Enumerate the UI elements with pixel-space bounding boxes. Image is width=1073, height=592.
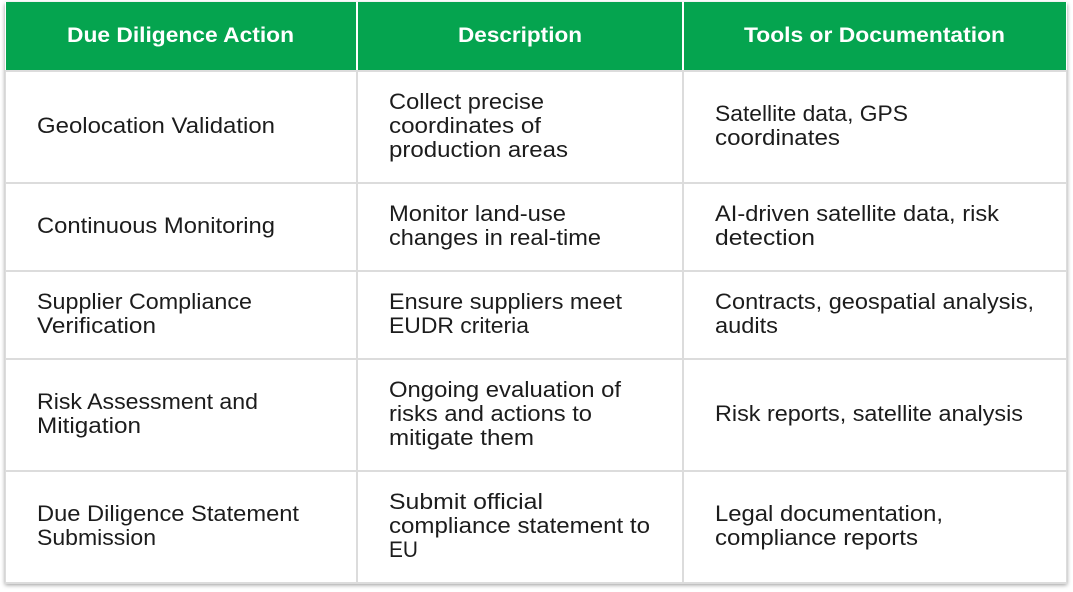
row: continuous monitoring: Continuous Monitoring xyxy=(37,213,275,238)
row: continuous monitoring: changes in real-time xyxy=(389,225,601,250)
row: continuous monitoring xyxy=(37,201,1000,250)
row: due diligence statement submission: compliance reports xyxy=(715,525,918,550)
row: supplier compliance verification: Contracts, geospatial analysis, xyxy=(715,289,1034,314)
row: continuous monitoring: detection xyxy=(715,225,815,250)
row: geolocation validation: Collect precise xyxy=(389,89,544,114)
row: due diligence statement submission xyxy=(37,489,943,562)
row: geolocation validation: production areas xyxy=(389,137,568,162)
row: due diligence statement submission: Submission xyxy=(37,525,156,550)
row: risk assessment and mitigation: Risk Assessment and xyxy=(37,389,258,414)
row: geolocation validation: coordinates of xyxy=(389,113,542,138)
row: due diligence statement submission: compliance statement to xyxy=(389,513,650,538)
row: continuous monitoring: Monitor land-use xyxy=(389,201,566,226)
row: supplier compliance verification: audits xyxy=(715,313,778,338)
row: continuous monitoring: AI-driven satellite data, risk xyxy=(715,201,1000,226)
row: due diligence statement submission: EU xyxy=(389,537,418,562)
heading: tools or documentation: Tools or Documentation xyxy=(744,24,1005,47)
row: supplier compliance verification: Ensure suppliers meet xyxy=(389,289,622,314)
header row xyxy=(6,2,1066,70)
heading: due diligence action: Due Diligence Action xyxy=(67,24,294,47)
row: risk assessment and mitigation: mitigate them xyxy=(389,425,534,450)
row: supplier compliance verification: EUDR criteria xyxy=(389,313,530,338)
row: due diligence statement submission: Due Diligence Statement xyxy=(37,501,299,526)
row: due diligence statement submission: Submit official xyxy=(389,489,543,514)
row: geolocation validation: coordinates xyxy=(715,125,840,150)
row: risk assessment and mitigation xyxy=(37,377,1023,450)
row: risk assessment and mitigation: Mitigation xyxy=(37,413,141,438)
row: supplier compliance verification xyxy=(37,289,1034,338)
row: geolocation validation xyxy=(37,89,908,162)
row: geolocation validation: Geolocation Validation xyxy=(37,113,275,138)
row: supplier compliance verification: Verification xyxy=(37,313,156,338)
row: risk assessment and mitigation: Risk reports, satellite analysis xyxy=(715,401,1023,426)
row: risk assessment and mitigation: Ongoing evaluation of xyxy=(389,377,622,402)
row: risk assessment and mitigation: risks and actions to xyxy=(389,401,592,426)
row: geolocation validation: Satellite data, GPS xyxy=(715,101,908,126)
heading: description: Description xyxy=(458,24,582,47)
row: supplier compliance verification: Supplier Compliance xyxy=(37,289,252,314)
row: due diligence statement submission: Legal documentation, xyxy=(715,501,943,526)
